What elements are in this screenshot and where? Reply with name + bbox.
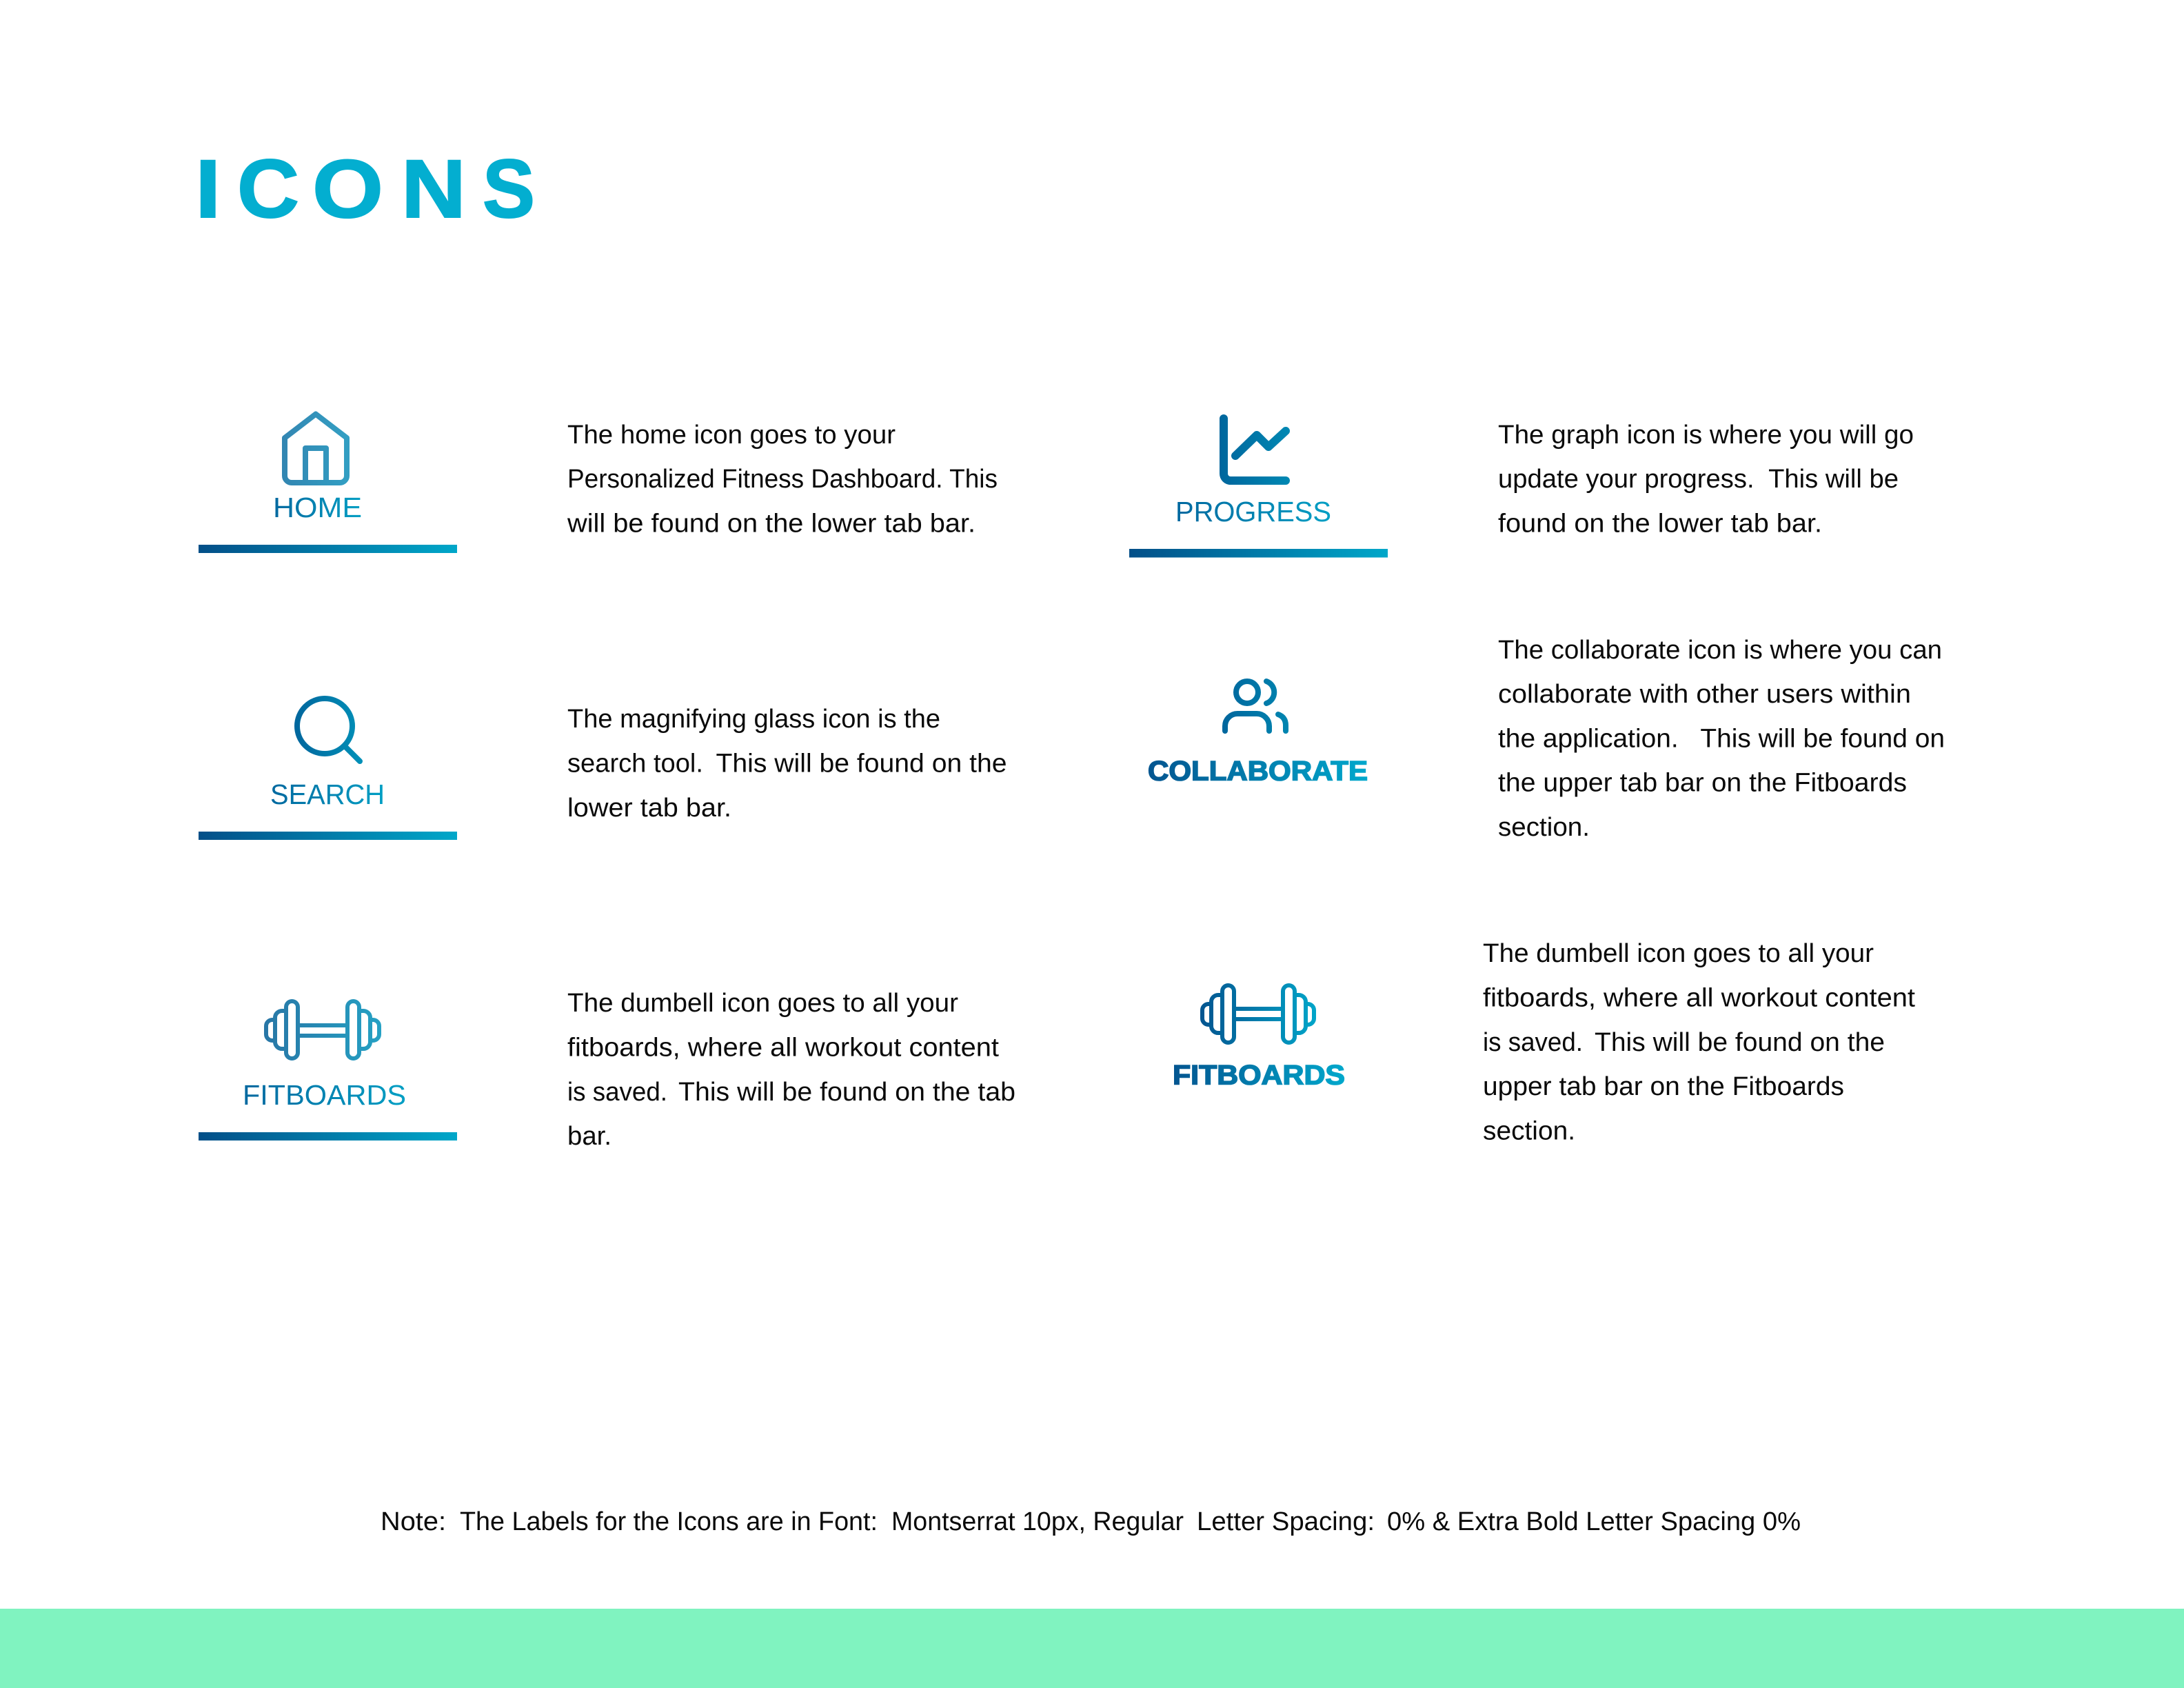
text: fitboards upper description: The dumbell icon goes to all your — [1483, 939, 1874, 968]
title: O — [312, 143, 383, 235]
note: Letter Spacing: — [1197, 1507, 1375, 1536]
text: fitboards description: fitboards, where all workout content — [567, 1033, 999, 1062]
label: search: SEARCH — [270, 778, 385, 810]
text: fitboards description: The dumbell icon goes to all your — [567, 989, 958, 1018]
text: fitboards upper description — [1483, 939, 1915, 1146]
title: S — [483, 143, 535, 235]
text: progress description: The graph icon is where you will go — [1498, 421, 1914, 450]
icon: dumbbell — [266, 1001, 379, 1058]
underline: progress — [1129, 549, 1388, 557]
text: home description — [567, 421, 998, 538]
text: collaborate description: The collaborate icon is where you can — [1498, 636, 1942, 665]
text: collaborate description: the application. This will be found on — [1498, 724, 1945, 753]
icon: dumbbell upper — [1202, 985, 1314, 1043]
text: fitboards description: is saved. — [567, 1078, 667, 1107]
title: I — [195, 143, 221, 235]
text: collaborate description — [1498, 636, 1945, 842]
label: fitboards: FITBOARDS — [243, 1079, 406, 1111]
panel: fitboards — [199, 989, 1015, 1151]
footer band — [0, 1609, 2184, 1688]
text: fitboards upper description: upper tab bar on the Fitboards — [1483, 1072, 1844, 1101]
title — [195, 143, 535, 235]
icon: home — [285, 414, 347, 483]
label: fitboards upper: FITBOARDS — [1173, 1061, 1345, 1091]
note: Montserrat 10px, Regular — [891, 1507, 1184, 1536]
text: fitboards description: This will be found on the tab — [678, 1078, 1015, 1107]
text: progress description: found on the lower tab bar. — [1498, 509, 1822, 538]
underline: fitboards — [199, 1132, 457, 1141]
text: search description: lower tab bar. — [567, 794, 731, 823]
note: The Labels for the Icons are in Font: — [460, 1507, 878, 1536]
underline: home — [199, 545, 457, 553]
text: fitboards upper description: fitboards, where all workout content — [1483, 983, 1915, 1012]
panel: home — [199, 414, 998, 553]
panel: progress — [1129, 419, 1914, 557]
underline: search — [199, 832, 457, 840]
text: search description: The magnifying glass icon is the — [567, 705, 940, 734]
panel: collaborate — [1148, 636, 1945, 842]
title: N — [401, 143, 466, 235]
text: fitboards upper description: section. — [1483, 1117, 1575, 1146]
label: home: HOME — [273, 492, 362, 523]
icon: people — [1225, 681, 1286, 731]
text: search description — [567, 705, 1007, 823]
note — [381, 1507, 1801, 1536]
text: collaborate description: section. — [1498, 813, 1590, 842]
text: home description: The home icon goes to your — [567, 421, 896, 450]
note: 0% & Extra Bold Letter Spacing 0% — [1387, 1507, 1801, 1536]
text: progress description — [1498, 421, 1914, 538]
text: search description: search tool. — [567, 749, 703, 778]
text: fitboards description — [567, 989, 1015, 1151]
icon: graph — [1224, 419, 1286, 481]
text: progress description: update your progress. This will be — [1498, 465, 1899, 494]
title: C — [237, 143, 299, 235]
text: home description: Personalized Fitness Dashboard. This — [567, 465, 998, 494]
text: fitboards upper description: This will be found on the — [1595, 1028, 1885, 1057]
text: search description: This will be found on the — [716, 749, 1007, 778]
panel: search — [199, 699, 1007, 840]
label: collaborate: COLLABORATE — [1148, 756, 1368, 786]
text: fitboards description: bar. — [567, 1122, 611, 1151]
icon: magnifying glass — [297, 699, 360, 761]
panel: fitboards upper — [1173, 939, 1915, 1146]
note: Note: — [381, 1507, 446, 1536]
label: progress: PROGRESS — [1175, 496, 1331, 528]
text: collaborate description: collaborate with other users within — [1498, 680, 1911, 709]
text: fitboards upper description: is saved. — [1483, 1028, 1583, 1057]
text: home description: will be found on the lower tab bar. — [567, 509, 975, 538]
text: collaborate description: the upper tab bar on the Fitboards — [1498, 768, 1907, 797]
